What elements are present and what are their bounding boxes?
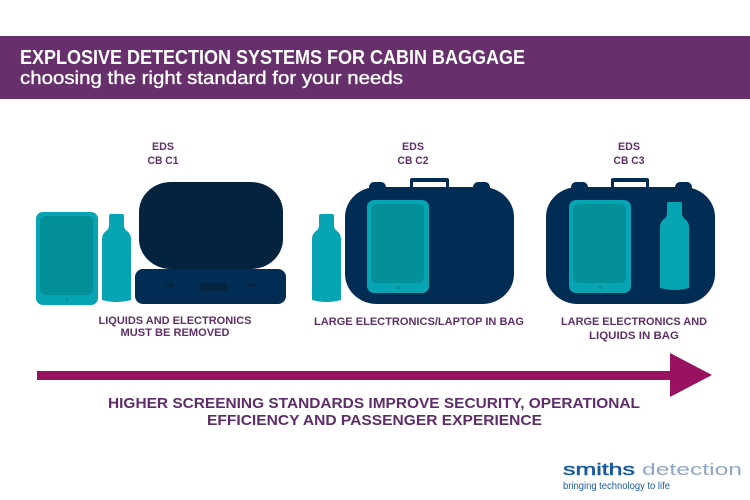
label: EDS CB C3: EDS (618, 141, 640, 153)
logo: smiths detection (563, 460, 742, 492)
label: EDS CB C3: CB C3 (614, 155, 644, 167)
panel: EDS CB C3 (546, 141, 715, 342)
conclusion text: EFFICIENCY AND PASSENGER EXPERIENCE (207, 412, 542, 429)
conclusion text: HIGHER SCREENING STANDARDS IMPROVE SECURITY, OPERATIONAL (108, 395, 640, 412)
caption: LARGE ELECTRONICS/LAPTOP IN BAG (314, 316, 524, 328)
icon: bottle (102, 214, 131, 302)
icon: tablet (569, 200, 631, 293)
icon: tablet (367, 200, 429, 293)
caption: LARGE ELECTRONICS AND (561, 316, 707, 328)
label: EDS CB C2: EDS (402, 141, 424, 153)
icon: tablet (36, 212, 98, 305)
label: EDS CB C1: CB C1 (148, 155, 178, 167)
logo: smiths detection: bringing technology to life (563, 481, 670, 492)
caption (98, 315, 252, 339)
title: EXPLOSIVE DETECTION SYSTEMS FOR CABIN BAGGAGE (20, 47, 525, 69)
panel: EDS CB C1 (36, 141, 286, 339)
label: EDS CB C2: CB C2 (398, 155, 428, 167)
icon: bottle (312, 214, 341, 302)
label: EDS CB C1 (148, 141, 178, 167)
label: EDS CB C2 (398, 141, 428, 167)
logo: smiths detection: smiths (563, 460, 635, 479)
panel: EDS CB C2 (312, 141, 524, 328)
icon: open laptop (135, 182, 286, 304)
label: EDS CB C1: EDS (152, 141, 174, 153)
caption: LIQUIDS IN BAG (589, 330, 679, 342)
caption: MUST BE REMOVED (120, 327, 230, 339)
caption: LIQUIDS AND ELECTRONICS (98, 315, 252, 327)
arrow (37, 353, 712, 397)
conclusion text (108, 395, 640, 429)
logo: smiths detection: detection (642, 460, 742, 479)
subtitle: choosing the right standard for your needs (20, 68, 403, 88)
caption (561, 316, 707, 342)
header banner (0, 36, 750, 99)
icon: suitcase (546, 178, 715, 304)
icon: bottle (660, 202, 689, 290)
icon: suitcase (345, 178, 514, 304)
label: EDS CB C3 (614, 141, 644, 167)
